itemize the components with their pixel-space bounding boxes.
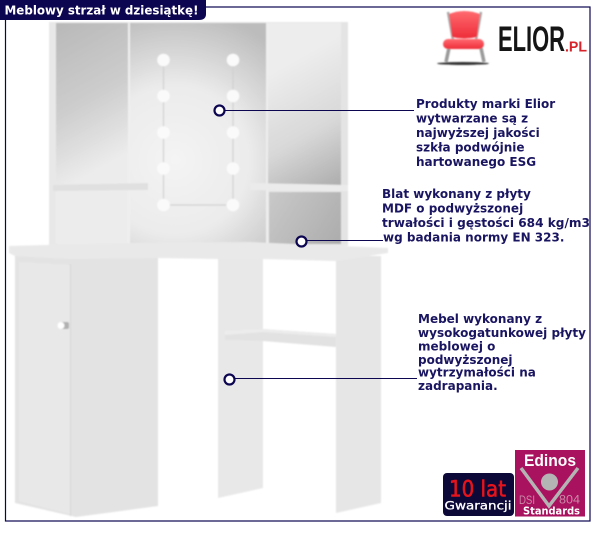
leader line xyxy=(224,110,414,112)
right leg xyxy=(336,256,381,513)
text: szkła podwójnie xyxy=(416,140,524,154)
icon: red chair xyxy=(437,11,489,65)
text: najwyższej jakości xyxy=(416,126,540,140)
header title: Meblowy strzał w dziesiątkę! xyxy=(4,2,198,18)
warranty label: Gwarancji xyxy=(444,498,512,512)
text: wytrzymałości na xyxy=(418,366,536,380)
text: Blat wykonany z płyty xyxy=(382,187,531,201)
standards label: Standards xyxy=(523,504,580,518)
warranty years: 10 lat xyxy=(449,478,506,502)
leader line xyxy=(306,240,383,242)
DSI label: DSI xyxy=(519,495,535,507)
text: zadrapania. xyxy=(418,379,498,393)
callout: board xyxy=(224,312,590,393)
text: MDF o podwyższonej xyxy=(382,202,523,216)
leader line xyxy=(234,378,417,380)
header banner xyxy=(0,0,206,20)
text: wg badania normy EN 323. xyxy=(383,230,564,244)
furniture illustration: corner vanity xyxy=(9,22,388,517)
middle leg xyxy=(218,256,263,498)
mirror light bulbs xyxy=(157,54,239,211)
cabinet knob xyxy=(58,322,69,329)
logo: Elior.pl xyxy=(437,11,587,65)
brand name: Edinos xyxy=(524,452,576,470)
text: wysokogatunkowej płyty xyxy=(418,326,586,340)
text: hartowanego ESG xyxy=(416,155,536,169)
badge: 10 year warranty xyxy=(443,473,514,516)
text: Produkty marki Elior xyxy=(416,97,555,111)
logo suffix: .PL xyxy=(565,38,587,56)
callout: glass xyxy=(214,97,559,169)
mirror shelves xyxy=(53,183,348,191)
804 label: 804 xyxy=(559,494,581,506)
badge: Edinos standards xyxy=(515,450,585,518)
tabletop xyxy=(9,242,388,261)
text: Mebel wykonany z xyxy=(418,312,542,326)
text: meblowej o xyxy=(418,340,495,354)
icon: V with circle xyxy=(521,468,578,506)
text: podwyższonej xyxy=(418,353,512,367)
text: wytwarzane są z xyxy=(416,112,528,126)
mirror xyxy=(49,22,348,246)
marker xyxy=(296,236,306,246)
text: trwałości i gęstości 684 kg/m3 xyxy=(382,216,590,230)
lower shelf xyxy=(225,329,336,347)
marker xyxy=(214,106,224,116)
callout: tabletop xyxy=(296,187,594,246)
marker xyxy=(224,374,234,384)
cabinet with door xyxy=(15,256,158,517)
